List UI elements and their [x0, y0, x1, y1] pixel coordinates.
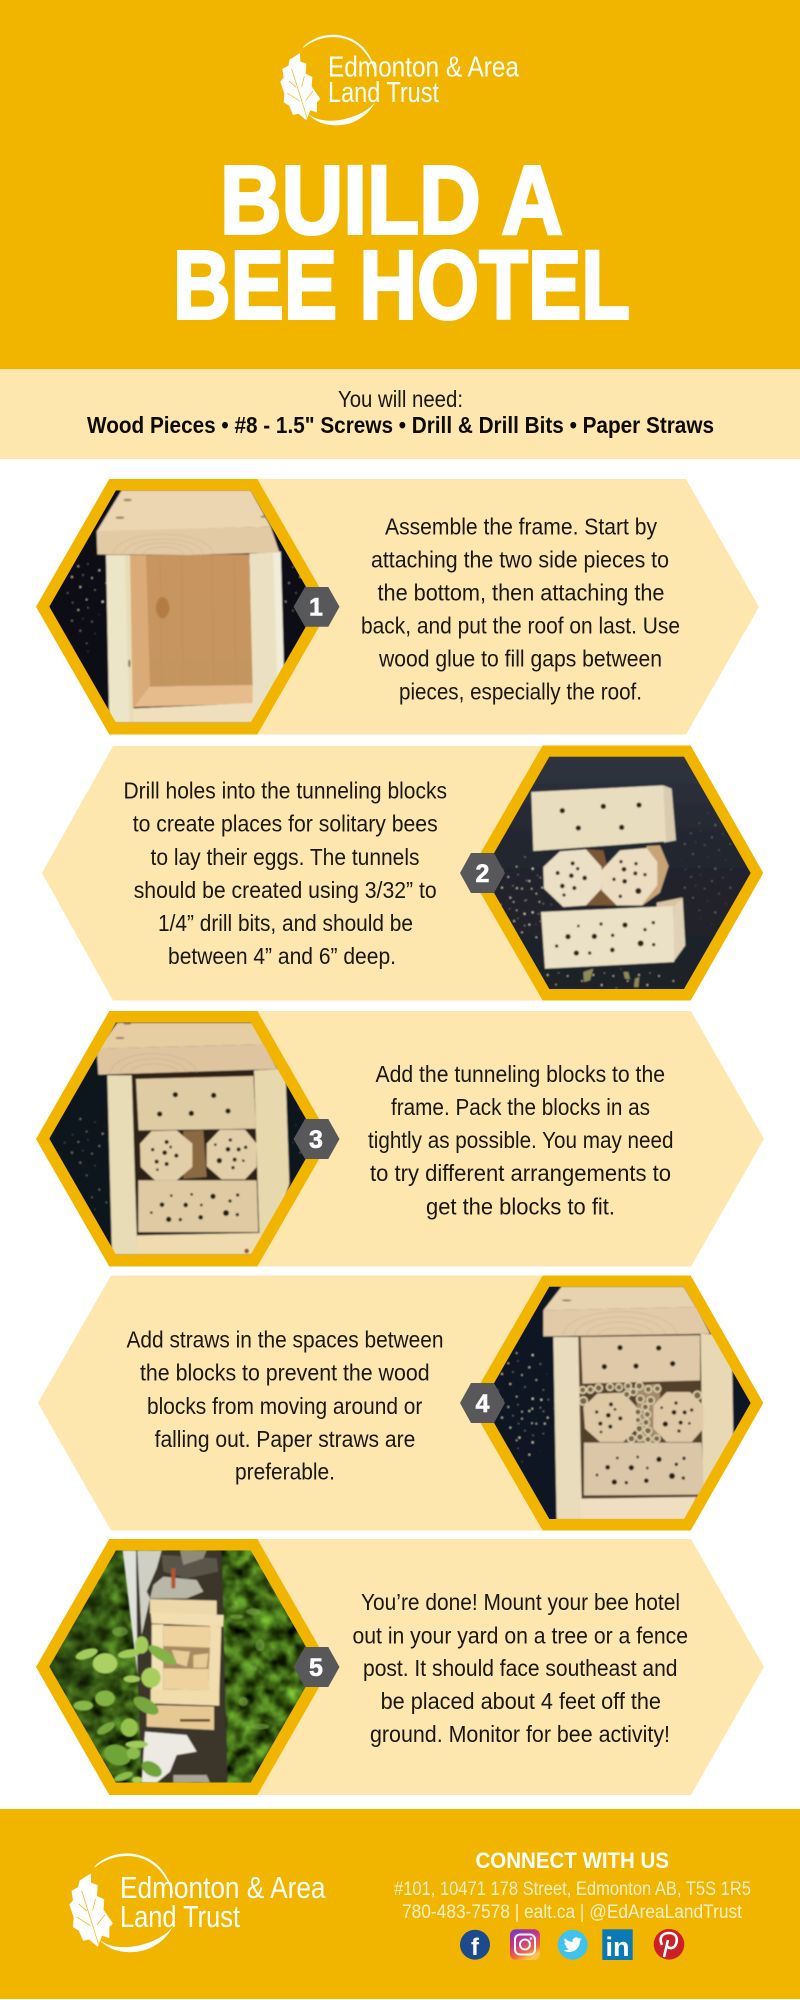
number badge 2: 2 [476, 860, 489, 888]
materials band [0, 369, 800, 459]
logo: Edmonton & Area Land Trust (footer): Edmonton & Area [120, 1870, 326, 1905]
step 1 text: the bottom, then attaching the [378, 580, 664, 606]
step 1 text: Assemble the frame. Start by [385, 514, 657, 540]
icon: twitter [558, 1930, 588, 1960]
step 3 text: Add the tunneling blocks to the [376, 1061, 665, 1087]
step 4 text: blocks from moving around or [147, 1393, 423, 1419]
logo: Edmonton & Area Land Trust (header) [280, 35, 520, 125]
contact heading: CONNECT WITH US [476, 1848, 669, 1873]
icon: instagram [510, 1929, 540, 1960]
photo: straws added between blocks [494, 1286, 750, 1519]
step 5 text: ground. Monitor for bee activity! [370, 1721, 670, 1747]
panel: step 3 [30, 1007, 764, 1272]
title: BUILD A [220, 146, 563, 254]
panel: step 4 [38, 1272, 770, 1537]
footer band [0, 1809, 800, 1999]
contact details [394, 1878, 751, 1923]
step 4 text: falling out. Paper straws are [155, 1426, 415, 1452]
panel: step 2 [42, 742, 770, 1007]
number badge 2 [460, 853, 505, 893]
materials band: You will need: [338, 386, 463, 412]
number badge 5: 5 [309, 1654, 323, 1682]
step 2 text: 1/4” drill bits, and should be [158, 910, 413, 936]
step 2 text: Drill holes into the tunneling blocks [124, 778, 447, 804]
step 1 text: back, and put the roof on last. Use [361, 612, 680, 638]
step 2 text [124, 778, 447, 969]
step 4 text [126, 1327, 444, 1484]
step 1 text: pieces, especially the roof. [399, 678, 642, 704]
step 3 text: to try different arrangements to [370, 1160, 671, 1186]
logo: Edmonton & Area Land Trust (footer) [69, 1853, 326, 1952]
step 2 text: to create places for solitary bees [133, 811, 438, 837]
materials band: Wood Pieces • #8 - 1.5" Screws • Drill & Drill Bits • Paper Straws [87, 412, 714, 438]
step 1 text [361, 514, 680, 704]
step 4 text: Add straws in the spaces between [126, 1327, 444, 1353]
step 3 text: frame. Pack the blocks in as [391, 1094, 650, 1120]
logo: Edmonton & Area Land Trust (header): Land Trust [328, 77, 439, 109]
number badge 5 [294, 1647, 340, 1687]
number badge 3 [294, 1119, 340, 1159]
step 5 text: post. It should face southeast and [363, 1655, 678, 1681]
step 3 text: tightly as possible. You may need [368, 1127, 674, 1153]
step 4 text: preferable. [235, 1458, 335, 1484]
step 3 text: get the blocks to fit. [426, 1194, 615, 1220]
step 1 text: attaching the two side pieces to [371, 547, 669, 573]
number badge 1: 1 [309, 594, 323, 622]
step 1 text: wood glue to fill gaps between [378, 646, 662, 672]
contact details: 780-483-7578 | ealt.ca | @EdAreaLandTrust [402, 1901, 743, 1923]
title [173, 146, 630, 340]
step 2 text: to lay their eggs. The tunnels [150, 844, 420, 870]
icon: pinterest [654, 1929, 684, 1960]
number badge 4 [460, 1383, 505, 1423]
logo: Edmonton & Area Land Trust (footer): Land Trust [120, 1899, 240, 1934]
step 4 text: the blocks to prevent the wood [140, 1360, 430, 1386]
step 5 text: out in your yard on a tree or a fence [352, 1622, 688, 1648]
step 2 text: between 4” and 6” deep. [168, 943, 396, 969]
title: BEE HOTEL [173, 230, 630, 340]
logo: Edmonton & Area Land Trust (header): Edmonton & Area [328, 52, 520, 84]
step 2 text: should be created using 3/32” to [134, 877, 437, 903]
panel: step 1 [30, 475, 759, 740]
number badge 4: 4 [476, 1390, 490, 1418]
icon: facebook [460, 1930, 490, 1961]
panel: step 5 [30, 1535, 764, 1800]
photo: blocks inside frame [49, 1022, 306, 1254]
step 5 text [352, 1589, 688, 1747]
photo: empty frame [49, 490, 306, 722]
number badge 1 [294, 587, 340, 627]
step 5 text: You’re done! Mount your bee hotel [361, 1589, 680, 1615]
number badge 3: 3 [309, 1126, 323, 1154]
icon: linkedin: in [606, 1932, 630, 1962]
step 5 text: be placed about 4 feet off the [381, 1688, 661, 1714]
step 3 text [368, 1061, 674, 1220]
header band [0, 0, 800, 369]
photo: bee hotel mounted on a tree [49, 1550, 306, 1783]
photo: drilled tunneling blocks [494, 756, 750, 989]
icon: facebook: f [471, 1934, 480, 1961]
